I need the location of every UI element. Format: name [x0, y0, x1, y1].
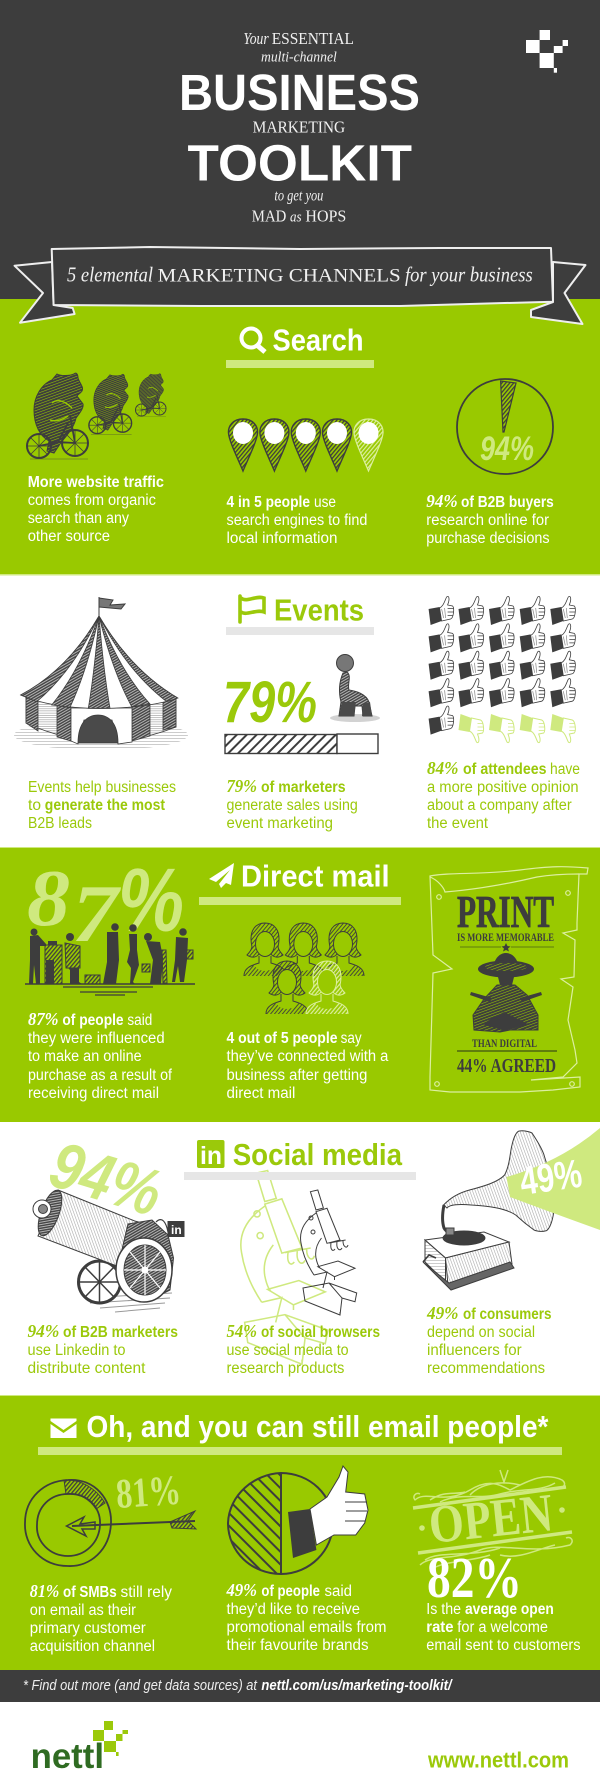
- text: 94% of B2B buyers: research online for: [426, 512, 549, 529]
- text: average open rate: rate: [426, 1619, 454, 1636]
- text: 49% of people: promotional emails from: [226, 1619, 386, 1636]
- text: 84% of attendees: the event: [427, 815, 489, 832]
- poster: print is more memorable: 44% AGREED: [457, 1055, 556, 1077]
- illustration: OPEN ornament: OPEN: [426, 1482, 556, 1555]
- text: 84% of attendees: of attendees: [463, 761, 546, 778]
- poster headline: PRINT: [457, 886, 554, 937]
- illustration: bears on bicycles: [27, 373, 166, 459]
- banner text: for your business: [405, 263, 533, 287]
- title block: MAD: [252, 207, 286, 226]
- text: 94% of B2B marketers: distribute content: [28, 1360, 146, 1377]
- text: events B2B leads: to: [28, 797, 41, 814]
- text: 94% of B2B marketers: 94%: [28, 1321, 59, 1341]
- text: average open rate: average open: [465, 1601, 554, 1618]
- text: organic traffic: search than any: [28, 510, 129, 527]
- rear wheel: [78, 1261, 120, 1303]
- text: 79% of marketers: generate sales using: [226, 797, 358, 814]
- title block: BUSINESS: [179, 64, 420, 121]
- icon: flag: [240, 596, 264, 622]
- chart: target with arrow, 81%: 81%: [114, 1468, 183, 1518]
- text: average open rate: [426, 1601, 581, 1654]
- icon row: 4 in 5 map pins: [228, 419, 383, 471]
- illustration: microscopes, 54%: [241, 1170, 357, 1364]
- text: 49% of people: said: [324, 1583, 352, 1600]
- text: organic traffic: [28, 474, 164, 545]
- ground lines: [86, 1293, 172, 1312]
- icon: envelope: [50, 1418, 76, 1438]
- banner text: 5 elemental: [67, 263, 153, 287]
- logo mark: white squares: [526, 30, 568, 73]
- heading: Search: Search: [272, 323, 364, 358]
- text: 4 out of 5 people: business after getting: [226, 1067, 367, 1084]
- text: 49% of people: 49%: [226, 1580, 257, 1600]
- text: 4 out of 5 people: they’ve connected with a: [226, 1048, 389, 1065]
- text: 4 in 5 people: search engines to find: [226, 512, 367, 529]
- text: 81% of SMBs: 81%: [30, 1581, 59, 1601]
- text: 94% of B2B buyers: 94%: [426, 491, 458, 511]
- text: 49% of people: they’d like to receive: [226, 1601, 360, 1618]
- text: 49% of consumers: influencers for: [427, 1342, 522, 1359]
- text: 79% of marketers: [226, 776, 358, 832]
- text: organic traffic: other source: [28, 528, 110, 545]
- illustration: circus seal with ball: [330, 654, 380, 722]
- text: 54% of social browsers: research products: [226, 1360, 345, 1377]
- chart: half pie with thumb, 49%: [228, 1466, 368, 1574]
- poster: print is more memorable: IS MORE MEMORABLE: [457, 930, 554, 944]
- title block: ESSENTIAL: [272, 29, 354, 48]
- text: 79% of marketers: 79%: [226, 776, 257, 796]
- text: 4 out of 5 people: direct mail: [226, 1085, 295, 1102]
- poster: print is more memorable: [430, 867, 588, 1092]
- icon: paper plane: [209, 863, 234, 888]
- text: 84% of attendees: 84%: [427, 758, 458, 778]
- stat: big 87%: [27, 851, 184, 959]
- icon: big thumbs up: [288, 1466, 368, 1558]
- text: 81% of SMBs: [30, 1581, 172, 1655]
- barrel: [38, 1190, 150, 1268]
- text: 4 in 5 people: 4 in 5 people: [226, 494, 310, 511]
- text: 87% of people: said: [127, 1012, 152, 1029]
- illustration: OPEN ornament: [413, 1470, 572, 1570]
- text: 49% of people: [226, 1580, 386, 1654]
- text: 79% of marketers: event marketing: [226, 815, 333, 832]
- title block: multi-channel: [261, 50, 337, 66]
- text: 81% of SMBs: of SMBs: [63, 1584, 117, 1601]
- text: 49% of consumers: [426, 1303, 552, 1377]
- text: 49% of consumers: depend on social: [427, 1324, 535, 1341]
- title block: HOPS: [305, 207, 346, 226]
- text: 54% of social browsers: of social browsers: [261, 1324, 380, 1341]
- heading: email: Oh, and you can still email people*: [86, 1409, 549, 1444]
- tent flag: [99, 597, 125, 616]
- heading: Direct mail: [199, 859, 401, 905]
- text: 87% of people: to make an online: [28, 1048, 142, 1065]
- front wheel: [116, 1238, 172, 1302]
- stat: big 87%: 7: [72, 868, 121, 959]
- footnote bar: * Find out more (and get data sources) at: [23, 1678, 258, 1694]
- text: 94% of B2B buyers: [426, 491, 554, 547]
- poster outline: [430, 867, 588, 1092]
- text: events B2B leads: Events help businesses: [28, 779, 176, 796]
- illustration: bandit with sombrero: [470, 953, 542, 1032]
- ground hatching: [14, 720, 188, 750]
- text: 87% of people: [28, 1009, 173, 1102]
- text: 94% of B2B buyers: of B2B buyers: [461, 494, 554, 511]
- icon grid: thumbs up and down: [429, 596, 575, 743]
- footnote bar: [0, 1670, 600, 1702]
- text: events B2B leads: generate the most: [45, 797, 165, 814]
- chart: target with arrow, 81%: [25, 1468, 196, 1566]
- tag: linkedin logo: in: [171, 1223, 182, 1237]
- text: 87% of people: they were influenced: [28, 1030, 165, 1047]
- illustration: circus tent: [14, 597, 188, 750]
- stat: 82%: 82%: [427, 1545, 522, 1610]
- text: 49% of people: of people: [261, 1583, 320, 1600]
- heading: email: [38, 1409, 562, 1455]
- text: 84% of attendees: a more positive opinion: [427, 779, 579, 796]
- tent walls: [26, 697, 176, 744]
- illustration: gramophone: [423, 1131, 554, 1290]
- ribbon banner: [14, 247, 586, 324]
- text: 4 in 5 people: local information: [226, 530, 338, 547]
- title block: TOOLKIT: [188, 135, 412, 192]
- illustration: cannon: [33, 1187, 184, 1312]
- text: average open rate: for a welcome: [457, 1619, 548, 1636]
- text: 87% of people: purchase as a result of: [28, 1067, 173, 1084]
- title block: as: [290, 210, 302, 226]
- illustration: group of people, 4 of 5: [244, 923, 364, 1014]
- text: 81% of SMBs: still rely: [120, 1584, 172, 1601]
- icon: magnifier: [242, 328, 265, 352]
- tent roof: [21, 616, 178, 708]
- stat: big 87%: 8: [27, 855, 70, 943]
- text: organic traffic: comes from organic: [28, 492, 156, 509]
- title block: to get you: [274, 188, 323, 205]
- text: 49% of consumers: 49%: [426, 1303, 458, 1323]
- callout: 49% wedge: [506, 1128, 600, 1230]
- text: 4 in 5 people: [226, 494, 367, 547]
- chart: 94% pie: [457, 379, 553, 474]
- text: 94% of B2B marketers: use Linkedin to: [28, 1342, 126, 1359]
- icon: linkedin: in: [200, 1142, 222, 1170]
- heading: Events: Events: [274, 593, 364, 628]
- text: 54% of social browsers: [226, 1321, 380, 1377]
- text: 87% of people: 87%: [28, 1009, 58, 1029]
- cannonball head: [33, 1200, 51, 1218]
- heading: Direct mail: Direct mail: [241, 859, 390, 894]
- footer url: www.nettl.com: [427, 1748, 569, 1773]
- text: 84% of attendees: about a company after: [427, 797, 572, 814]
- heading: Social media: Social media: [233, 1137, 403, 1172]
- footer logo: nettl: [31, 1721, 128, 1775]
- text: 81% of SMBs: on email as their: [30, 1602, 136, 1619]
- text: 54% of social browsers: use social media to: [226, 1342, 349, 1359]
- text: organic traffic: More website traffic: [28, 474, 164, 491]
- text: 84% of attendees: [427, 758, 580, 832]
- text: 49% of consumers: of consumers: [463, 1306, 552, 1323]
- progress bar: 79%: [225, 734, 378, 754]
- title block: Your: [243, 29, 269, 48]
- text: 4 out of 5 people: [226, 1030, 389, 1102]
- text: 87% of people: of people: [62, 1012, 124, 1029]
- tag: linkedin logo: [168, 1221, 184, 1237]
- text: 94% of B2B buyers: purchase decisions: [426, 530, 550, 547]
- text: 81% of SMBs: acquisition channel: [30, 1638, 155, 1655]
- text: 87% of people: receiving direct mail: [28, 1085, 159, 1102]
- text: 81% of SMBs: primary customer: [30, 1620, 146, 1637]
- title block: MARKETING: [253, 118, 345, 137]
- chart: 94% pie: 94%: [480, 430, 534, 468]
- stat: big 87%: %: [118, 851, 184, 951]
- text: 94% of B2B marketers: of B2B marketers: [63, 1324, 178, 1341]
- heading: Search: [226, 323, 374, 368]
- text: 4 out of 5 people: say: [341, 1030, 362, 1047]
- text: 94% of B2B marketers: [28, 1321, 178, 1377]
- text: 54% of social browsers: 54%: [226, 1321, 257, 1341]
- footer logo: nettl: nettl: [31, 1737, 104, 1775]
- illustration: shopping queue: [25, 923, 195, 995]
- banner text: MARKETING CHANNELS: [158, 266, 401, 287]
- text: 49% of people: their favourite brands: [226, 1637, 369, 1654]
- heading: Events: [226, 593, 374, 635]
- text: 49% of consumers: recommendations: [427, 1360, 545, 1377]
- text: 84% of attendees: have: [550, 761, 580, 778]
- callout: 49% wedge: 49%: [517, 1152, 585, 1204]
- title block: [179, 29, 420, 226]
- text: events B2B leads: [28, 779, 176, 832]
- footnote bar: nettl.com/us/marketing-toolkit/: [261, 1678, 453, 1694]
- heading: Social media: [184, 1137, 416, 1180]
- text: 79% of marketers: of marketers: [261, 779, 346, 796]
- text: events B2B leads: B2B leads: [28, 815, 92, 832]
- poster: print is more memorable: THAN DIGITAL: [472, 1036, 537, 1050]
- text: 4 in 5 people: use: [314, 494, 336, 511]
- banner text: [67, 263, 533, 287]
- text: 4 out of 5 people: 4 out of 5 people: [226, 1030, 338, 1047]
- text: average open rate: email sent to customers: [426, 1637, 581, 1654]
- stat: 79%: 79%: [223, 670, 317, 735]
- text: average open rate: Is the: [426, 1601, 461, 1618]
- stat: tilted 94%: 94%: [42, 1127, 171, 1230]
